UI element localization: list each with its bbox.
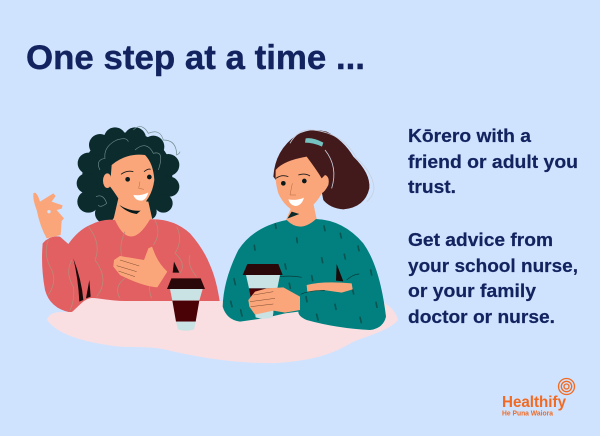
- text: talk to someone: trust.: [408, 176, 456, 197]
- curly hair: [77, 127, 179, 223]
- neck: [113, 198, 152, 238]
- teal sweater: [223, 219, 386, 330]
- coffee cup on table: [167, 278, 205, 331]
- resting hand: [307, 282, 353, 293]
- raised hand: [33, 193, 64, 238]
- logo mark: [558, 378, 574, 394]
- red sweater: [42, 219, 220, 312]
- text: get advice: doctor or nurse.: [408, 306, 555, 327]
- ponytail hair: [273, 130, 369, 209]
- coffee cup held: [243, 264, 283, 319]
- text: get advice: Get advice from: [408, 229, 553, 250]
- logo: Healthify: He Puna Waiora: [502, 408, 554, 418]
- title: One step at a time ...: [26, 39, 365, 77]
- hair strands: [96, 127, 180, 206]
- hair tie: [305, 138, 323, 147]
- illustration: two friends talking at a table: [33, 127, 398, 363]
- text: talk to someone: [408, 125, 578, 197]
- table: [47, 298, 398, 363]
- text: talk to someone: Kōrero with a: [408, 125, 532, 146]
- neck: [286, 203, 317, 227]
- woman with curly hair: [33, 127, 220, 312]
- logo: Healthify: [502, 378, 574, 418]
- hand on chest: [113, 247, 167, 287]
- logo: Healthify: Healthify: [502, 394, 566, 411]
- text: talk to someone: friend or adult you: [408, 151, 578, 172]
- text: get advice: or your family: [408, 280, 537, 301]
- face: [110, 155, 154, 210]
- face: [276, 157, 329, 214]
- hand holding cup: [248, 287, 300, 315]
- woman with ponytail: [223, 130, 386, 330]
- text: get advice: your school nurse,: [408, 255, 578, 276]
- text: get advice: [408, 229, 578, 327]
